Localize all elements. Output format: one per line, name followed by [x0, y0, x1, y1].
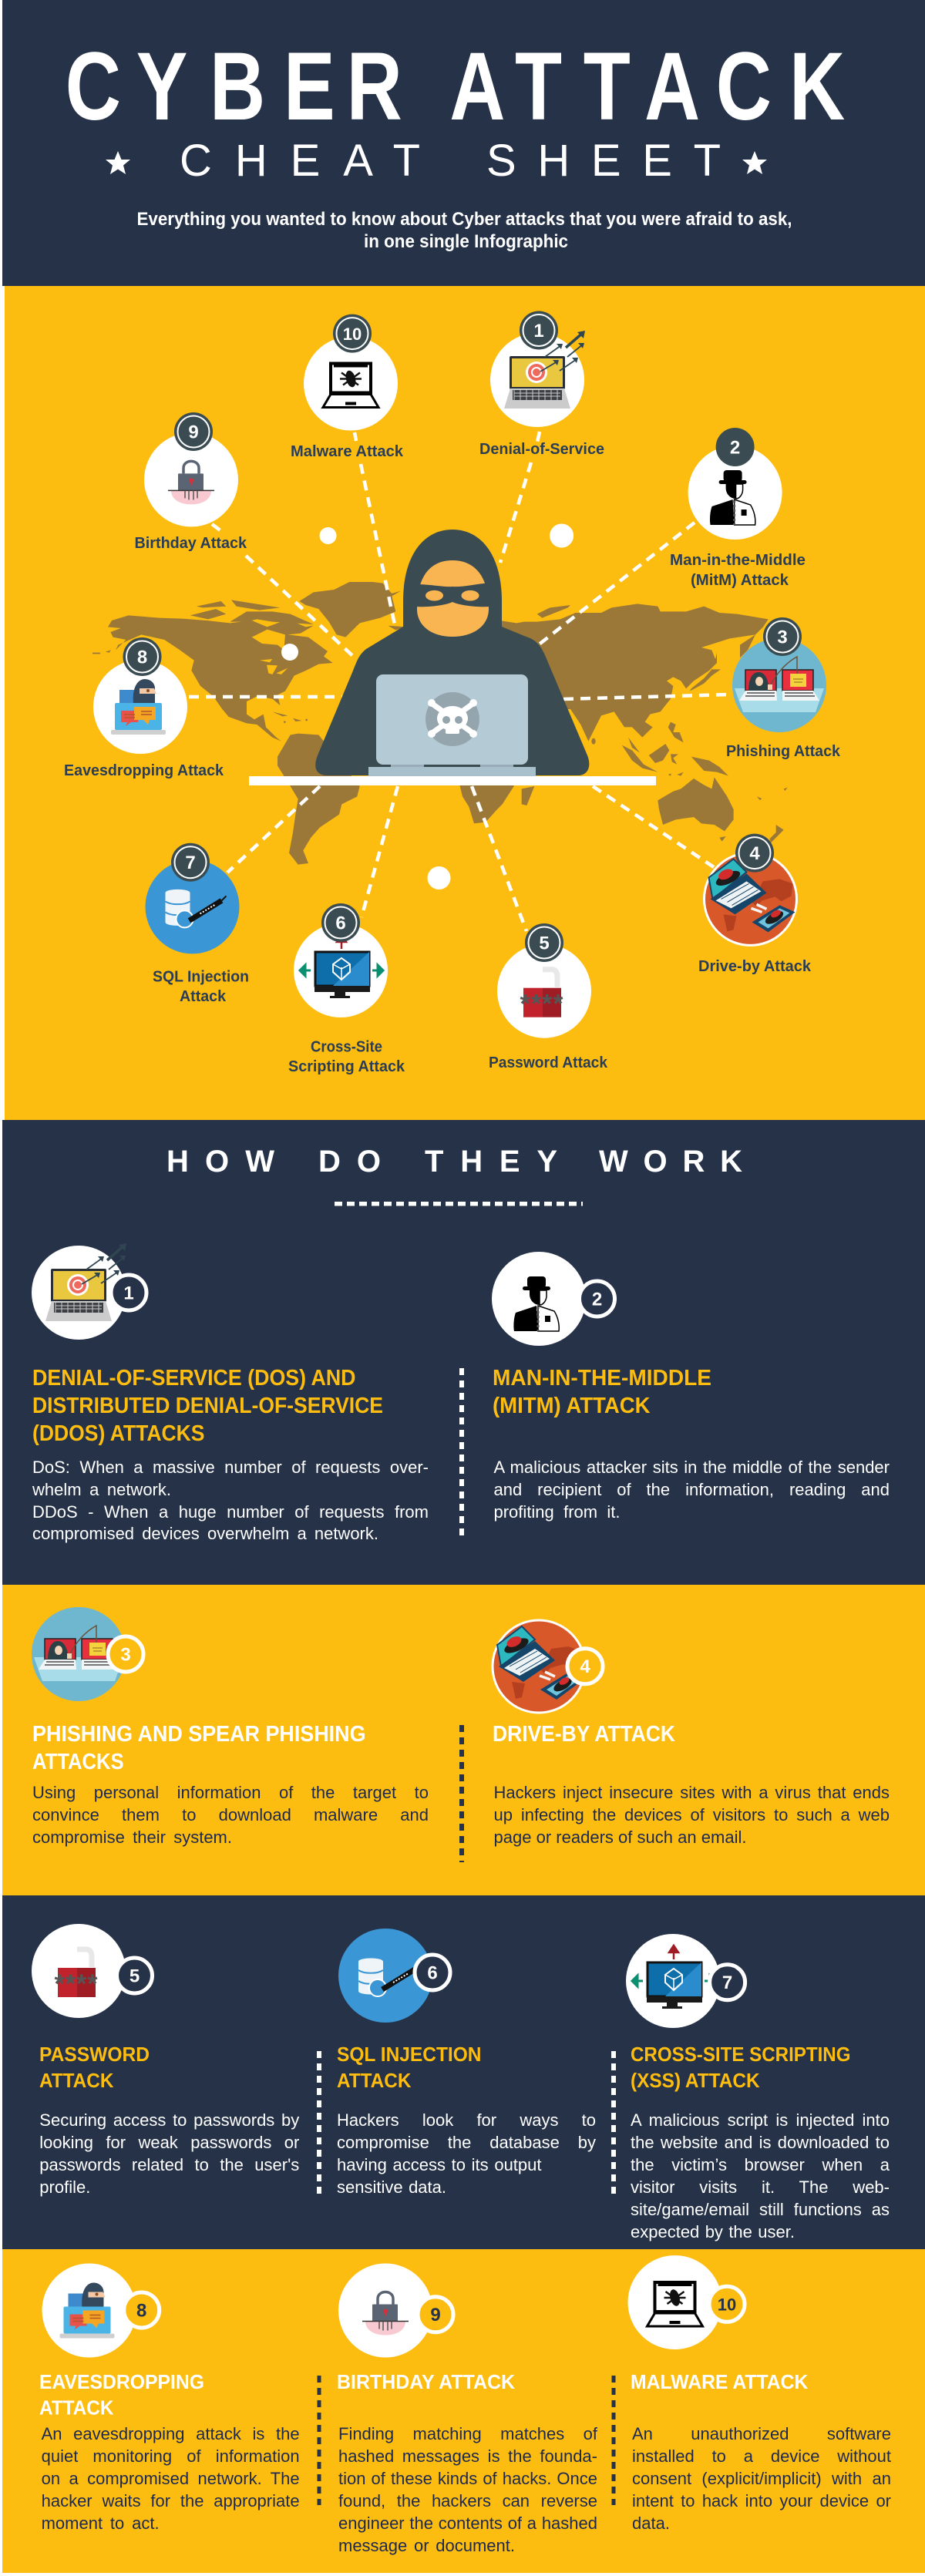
node 2: man in the middle: (MitM) Attack [691, 572, 789, 589]
decorative white dots [281, 524, 574, 889]
heading: attack 1: DISTRIBUTED DENIAL-OF-SERVICE [32, 1394, 383, 1418]
text: attack 8 description: An eavesdropping attack is the [42, 2424, 300, 2443]
text: attack 6 description: having access to its output [337, 2155, 541, 2174]
text: attack 8 description: hacker waits for the appropriate [42, 2491, 300, 2510]
panel: attacks 3-4 [2, 1585, 925, 1895]
text: attack 1 description: compromised devices overwhelm a network. [32, 1524, 378, 1543]
section heading [166, 1145, 742, 1179]
hacker figure [315, 530, 589, 776]
icon: attack 5 [32, 1924, 153, 2018]
text: attack 3 description: convince them to download malware and [32, 1805, 429, 1824]
text: attack 7 description: visitor visits it. The web- [631, 2177, 890, 2197]
node 8: eavesdropping: Eavesdropping Attack [64, 762, 224, 779]
intro text: Everything you wanted to know about Cyber attacks that you were afraid to ask, [137, 209, 792, 230]
heading: attack 1 [32, 1366, 383, 1446]
text: attack 5 description: profile. [39, 2177, 90, 2197]
node 7: sql injection: 7 [185, 853, 196, 873]
icon: attack 8: 8 [136, 2300, 146, 2322]
icon: attack 3 [32, 1607, 143, 1701]
text: attack 1 description: DoS: When a massive number of requests over- [32, 1458, 429, 1477]
text: attack 10 description: An unauthorized software [632, 2424, 891, 2443]
node 6: cross-site scripting: Cross-Site [311, 1039, 382, 1056]
icon: left star [106, 151, 130, 174]
node 6: cross-site scripting [288, 903, 405, 1075]
subtitle: cheat sheet: CHEAT [180, 136, 420, 186]
node 9: birthday [134, 412, 247, 552]
section heading: WORK [599, 1145, 742, 1179]
node 3: phishing: Phishing Attack [726, 743, 841, 760]
heading: attack 1: (DDOS) ATTACKS [32, 1421, 205, 1446]
node 7: sql injection: Attack [180, 988, 227, 1005]
heading: attack 2: MAN-IN-THE-MIDDLE [493, 1366, 711, 1391]
icon: attack 4 [493, 1620, 603, 1713]
subtitle: cheat sheet [180, 136, 721, 186]
node 6: cross-site scripting: 6 [335, 913, 346, 934]
text: attack 9 description: message or document. [338, 2536, 515, 2555]
heading: attack 10: MALWARE ATTACK [631, 2370, 809, 2393]
text: attack 2 description: A malicious attacker sits in the middle of the sender [493, 1458, 890, 1477]
node 9: birthday: Birthday Attack [134, 535, 247, 552]
title: CYBER ATTACK [66, 32, 845, 140]
text: attack 4 description [493, 1783, 890, 1847]
text: attack 7 description: expected by the user. [631, 2222, 795, 2241]
icon: attack 9 [338, 2263, 453, 2357]
subtitle: cheat sheet: SHEET [486, 136, 721, 186]
text: attack 10 description [632, 2424, 891, 2533]
icon: attack 8 [42, 2263, 160, 2357]
text: attack 9 description: tion of these kinds of hacks. Once [338, 2469, 597, 2488]
heading: attack 6 [337, 2043, 481, 2092]
text: attack 1 description: DDoS - When a huge number of requests from [32, 1502, 429, 1522]
text: attack 5 description: passwords related to the user's [39, 2155, 299, 2174]
icon: attack 2 [492, 1252, 615, 1346]
text: attack 4 description: Hackers inject insecure sites with a virus that ends [493, 1783, 890, 1802]
heading: attack 8 [39, 2370, 204, 2420]
section heading: HOW [166, 1145, 274, 1179]
node 6: cross-site scripting: Scripting Attack [288, 1058, 405, 1075]
text: attack 3 description [32, 1783, 429, 1847]
text: attack 7 description: site/game/email still functions as [631, 2200, 890, 2219]
heading: attack 3: ATTACKS [32, 1750, 124, 1774]
section heading: DO [318, 1145, 381, 1179]
node 7: sql injection [145, 843, 249, 1005]
text: attack 1 description [32, 1458, 429, 1543]
text: attack 10 description: installed to a device without [632, 2447, 891, 2466]
text: attack 9 description [338, 2424, 598, 2555]
heading: attack 7 [631, 2043, 851, 2092]
heading: attack 7: (XSS) ATTACK [631, 2069, 760, 2092]
heading: attack 4: DRIVE-BY ATTACK [493, 1722, 675, 1747]
text: attack 10 description: data. [632, 2514, 670, 2533]
node 1: denial of service [479, 311, 604, 458]
icon: attack 1 [32, 1243, 146, 1340]
icon: attack 7: 7 [722, 1972, 732, 1993]
heading: attack 7: CROSS-SITE SCRIPTING [631, 2043, 851, 2066]
node 10: malware: 10 [343, 325, 362, 344]
world map [92, 582, 788, 865]
text: attack 3 description: compromise their system. [32, 1828, 232, 1847]
node 8: eavesdropping: 8 [137, 647, 147, 668]
node 2: man in the middle: Man-in-the-Middle [670, 552, 806, 569]
text: attack 6 description: Hackers look for ways to [337, 2110, 596, 2130]
text: attack 5 description: looking for weak passwords or [39, 2133, 299, 2152]
text: attack 1 description: whelm a network. [32, 1480, 171, 1499]
heading: attack 2: (MITM) ATTACK [493, 1394, 651, 1418]
node 5: password: Password Attack [489, 1054, 608, 1071]
node 4: drive-by: 4 [749, 843, 760, 864]
icon: attack 10: 10 [718, 2295, 736, 2314]
node 8: eavesdropping [64, 637, 224, 779]
text: attack 8 description: quiet monitoring of information [42, 2447, 300, 2466]
node 7: sql injection: SQL Injection [153, 968, 249, 985]
heading: attack 6: ATTACK [337, 2069, 412, 2092]
node 4: drive-by: Drive-by Attack [698, 958, 812, 975]
icon: attack 4: 4 [580, 1656, 590, 1677]
icon: attack 9: 9 [430, 2305, 441, 2325]
node 5: password: 5 [539, 933, 550, 954]
text: attack 4 description: up infecting the devices of visitors to such a web [493, 1805, 890, 1824]
icon: attack 6: 6 [427, 1962, 438, 1984]
text: attack 7 description: the website and is downloaded to [631, 2133, 890, 2152]
panel: attacks 5-7 [2, 1895, 925, 2249]
text: attack 4 description: page or readers of such an email. [493, 1828, 746, 1847]
text: attack 7 description: A malicious script is injected into [631, 2110, 890, 2130]
node 5: password [489, 923, 608, 1071]
node 10: malware: Malware Attack [291, 443, 404, 460]
heading: attack 6: SQL INJECTION [337, 2043, 481, 2066]
icon: attack 1: 1 [123, 1283, 134, 1304]
node 4: drive-by [698, 834, 812, 975]
text: attack 7 description [631, 2110, 890, 2241]
text: attack 2 description: profiting from it. [493, 1502, 620, 1522]
text: attack 8 description [42, 2424, 300, 2533]
text: attack 6 description [337, 2110, 596, 2197]
icon: attack 10 [627, 2255, 745, 2349]
text: attack 7 description: the victim’s browser when a [631, 2155, 890, 2174]
heading: attack 5: PASSWORD [39, 2043, 150, 2066]
heading: attack 8: ATTACK [39, 2396, 114, 2420]
node 1: denial of service: Denial-of-Service [479, 441, 604, 458]
text: attack 9 description: Finding matching matches of [338, 2424, 597, 2443]
section heading: THEY [425, 1145, 557, 1179]
heading: attack 5 [39, 2043, 150, 2092]
icon: attack 5: 5 [130, 1966, 140, 1987]
heading: attack 1: DENIAL-OF-SERVICE (DOS) AND [32, 1366, 356, 1391]
icon: attack 3: 3 [120, 1645, 131, 1665]
heading: attack 2 [493, 1366, 711, 1418]
node 10: malware [291, 314, 404, 460]
text: attack 10 description: consent (explicit/implicit) with an [632, 2469, 891, 2488]
heading: attack 3 [32, 1722, 365, 1774]
node 3: phishing: 3 [777, 627, 788, 647]
text: attack 9 description: found, the hackers can reverse [338, 2491, 597, 2510]
heading: attack 5: ATTACK [39, 2069, 114, 2092]
text: attack 2 description: and recipient of the information, reading and [493, 1480, 890, 1499]
text: attack 6 description: sensitive data. [337, 2177, 446, 2197]
icon: attack 6 [338, 1929, 450, 2023]
panel: header [2, 0, 925, 286]
dashed connector lines [189, 432, 730, 931]
text: attack 8 description: moment to act. [42, 2514, 160, 2533]
text: attack 9 description: hashed messages is the founda- [338, 2447, 597, 2466]
panel: attack overview map [5, 286, 925, 1120]
node 2: man in the middle [670, 428, 806, 589]
heading: attack 9: BIRTHDAY ATTACK [337, 2370, 515, 2393]
text: attack 3 description: Using personal information of the target to [32, 1783, 429, 1802]
heading: attack 3: PHISHING AND SPEAR PHISHING [32, 1722, 365, 1747]
text: attack 10 description: intent to hack into your device or [632, 2491, 891, 2510]
text: attack 9 description: engineer the contents of a hashed [338, 2514, 597, 2533]
text: attack 5 description [39, 2110, 299, 2197]
text: attack 8 description: on a compromised network. The [42, 2469, 300, 2488]
intro text: in one single Infographic [364, 231, 568, 252]
icon: attack 2: 2 [592, 1289, 602, 1310]
node 3: phishing [726, 617, 841, 760]
icon: right star [742, 151, 767, 174]
node 1: denial of service: 1 [533, 321, 544, 341]
text: attack 5 description: Securing access to passwords by [39, 2110, 299, 2130]
intro text [137, 209, 792, 252]
panel: attacks 8-10 [2, 2249, 925, 2573]
text: attack 2 description [493, 1458, 890, 1522]
icon: attack 7 [626, 1934, 745, 2028]
panel: how do they work, attacks 1-2 [2, 1120, 925, 1585]
table [249, 776, 656, 785]
text: attack 6 description: compromise the database by [337, 2133, 596, 2152]
node 9: birthday: 9 [188, 422, 199, 442]
heading: attack 8: EAVESDROPPING [39, 2370, 204, 2393]
node 2: man in the middle: 2 [730, 438, 740, 458]
